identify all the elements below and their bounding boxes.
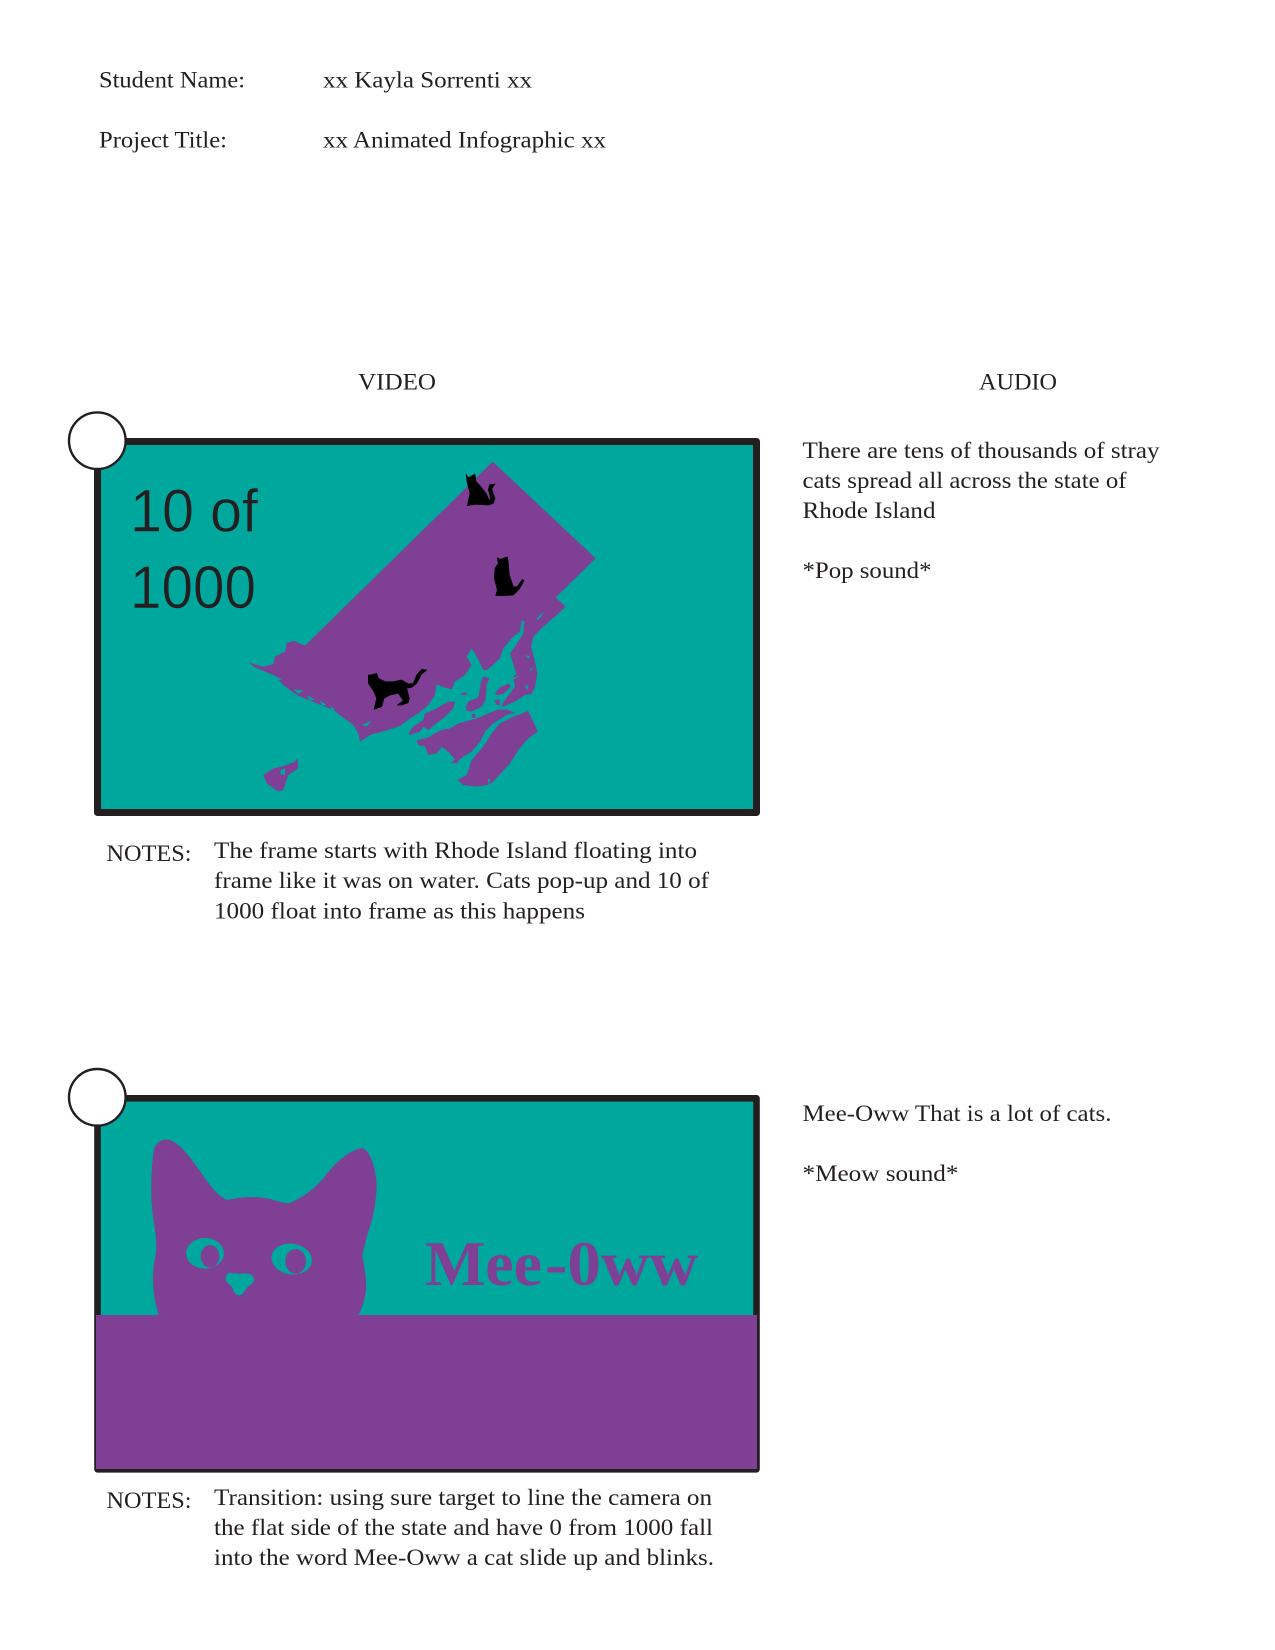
notes 2 — [106, 1485, 714, 1571]
Aquidneck island — [417, 709, 515, 763]
audio 1 text: There are tens of thousands of stray — [802, 438, 1160, 464]
student name row: Student Name: — [99, 68, 245, 94]
notes 1: NOTES: — [106, 841, 192, 867]
notes 1: 1000 float into frame as this happens — [214, 898, 585, 924]
project title row — [99, 128, 606, 154]
frame 2 background — [98, 1098, 756, 1469]
frame marker circle 2 — [69, 1069, 126, 1126]
Sakonnet land — [457, 711, 538, 787]
audio 1 text: Rhode Island — [802, 498, 936, 524]
frame marker circle 1 — [69, 412, 126, 469]
icon: cat sitting middle — [494, 557, 524, 596]
audio 2 text: Mee-Oww That is a lot of cats. — [802, 1101, 1112, 1127]
audio 2 text: *Meow sound* — [802, 1161, 958, 1187]
counter text: 10 of 1000 — [130, 478, 258, 621]
bay island — [466, 677, 489, 712]
notes 2: Transition: using sure target to line the camera on — [214, 1485, 712, 1511]
student name row: xx Kayla Sorrenti xx — [323, 68, 532, 94]
coast specks along southwest shore — [273, 675, 372, 727]
panel: frame 2 cat — [69, 1069, 757, 1469]
notes 2: the flat side of the state and have 0 from 1000 fall — [214, 1515, 714, 1541]
bay sliver islets — [461, 683, 511, 718]
frame 1 background — [98, 442, 756, 812]
counter text: 10 of 1000: 10 of — [130, 478, 258, 544]
audio 1 text: *Pop sound* — [802, 558, 932, 584]
notes 1 — [106, 838, 709, 924]
notes 2: NOTES: — [106, 1488, 192, 1514]
title: Mee-0ww: -0ww — [545, 1228, 698, 1299]
icon: cat sitting top — [466, 474, 495, 506]
heading: audio: AUDIO — [979, 370, 1057, 396]
notes 1: frame like it was on water. Cats pop-up and 10 of — [214, 868, 709, 894]
project title row: xx Animated Infographic xx — [323, 128, 606, 154]
audio 2 text — [802, 1101, 1112, 1187]
purple ground bar — [96, 1315, 757, 1469]
icon: cat head — [151, 1139, 377, 1317]
icon: cat walking — [368, 669, 427, 709]
panel: frame 1 Rhode Island — [69, 412, 756, 812]
notes 2: into the word Mee-Oww a cat slide up and blinks. — [214, 1545, 714, 1571]
notes 1: The frame starts with Rhode Island floating into — [214, 838, 697, 864]
counter text: 10 of 1000: 1000 — [130, 554, 256, 621]
project title row: Project Title: — [99, 128, 227, 154]
map: Rhode Island — [248, 462, 596, 792]
title: Mee-0ww: Mee — [425, 1228, 542, 1299]
student name row — [99, 68, 532, 94]
heading: video: VIDEO — [358, 370, 436, 396]
audio 1 text: cats spread all across the state of — [802, 468, 1127, 494]
title: Mee-0ww — [425, 1228, 698, 1299]
Conanicut island — [408, 702, 455, 735]
Block Island — [263, 758, 298, 792]
audio 1 text — [802, 438, 1160, 584]
Narragansett Bay water — [400, 612, 543, 732]
